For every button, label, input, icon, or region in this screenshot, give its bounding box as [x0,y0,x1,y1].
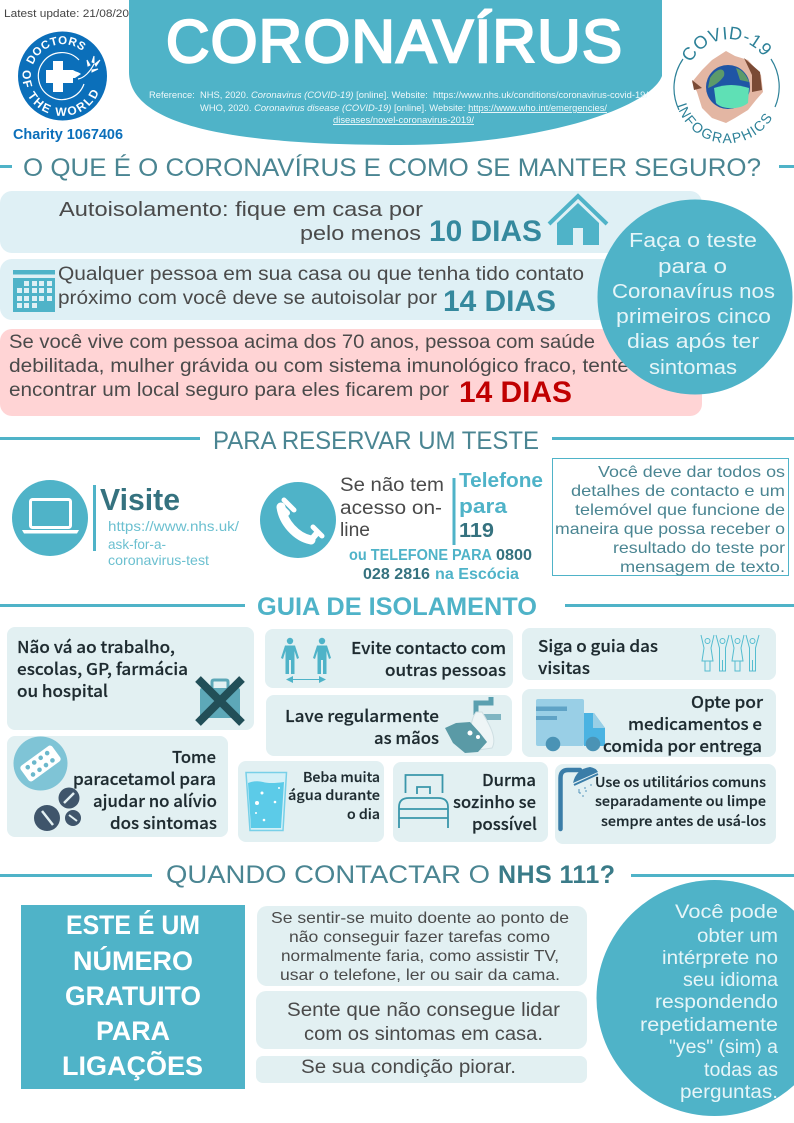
panel: do not go out [7,627,254,730]
callout: interpreter: seu idioma [683,970,778,991]
callout: get tested [598,200,792,394]
visit website [93,482,239,568]
logo: Doctors of the World: OF THE WORLD [22,70,98,116]
panel: free number: ESTE É UM [66,909,200,940]
panel: cannot cope: Sente que não consegue lidar [287,1000,561,1021]
panel: condition worsens: Se sua condição piorar. [301,1057,516,1078]
update date: Latest update: 21/08/20 [4,8,129,20]
panel: wash hands [266,695,512,756]
panel: delivery: Opte por [691,689,763,713]
panel: condition worsens [256,1056,587,1083]
references: WHO, 2020. Coronavirus disease (COVID-19) [online]. Website: https://www.who.int/emergencies/ [200,103,607,114]
panel: household 14 days [0,259,650,320]
heading: book a test: PARA RESERVAR UM TESTE [213,427,539,455]
panel: delivery: comida por entrega [603,733,762,757]
icon: telephone [260,482,336,558]
panel: sleep alone: sozinho se [453,789,536,813]
panel: drink water: água durante [288,784,380,804]
icon: crossed briefcase [198,679,242,723]
logo: COVID-19 infographics: COVID-19 [682,26,771,60]
panel: symptom too severe: não conseguir fazer tarefas como [289,929,550,946]
callout: get tested: para o [658,256,727,278]
panel: shared facilities: sempre antes de usá-los [601,810,766,830]
panel: do not go out: escolas, GP, farmácia [17,656,188,680]
note: contact details: mensagem de texto. [620,559,785,576]
callout: interpreter: obter um [697,926,778,947]
logo: Doctors of the World: DOCTORS [26,36,86,64]
phone booking: Se não tem [340,475,444,496]
panel: avoid contact: outras pessoas [385,657,506,681]
note: contact details: resultado do teste por [613,540,786,557]
panel: delivery [522,689,776,757]
heading: when to contact NHS 111 [0,861,794,889]
panel: shared facilities: Use os utilitários comuns [595,771,766,791]
panel: shared facilities [555,764,776,844]
callout: interpreter [596,880,794,1116]
icon: delivery truck [536,699,605,751]
callout: interpreter: intérprete no [662,948,778,969]
panel: sleep alone [393,762,548,842]
title: CORONAVÍRUS [166,8,622,75]
icon: laptop [12,480,88,556]
panel: cannot cope: com os sintomas em casa. [304,1024,543,1045]
references [149,90,648,126]
panel: paracetamol [7,736,228,837]
icon: house [549,196,607,245]
panel: visits: visitas [538,655,590,679]
panel: visits: Siga o guia das [538,633,658,657]
heading: isolation guide [0,593,794,621]
callout: interpreter: Você pode [675,902,778,923]
icon: shower [560,767,598,829]
visit website: Visite [100,482,180,517]
panel: vulnerable people warning: debilitada, mulher grávida ou com sistema imunológico fraco, tente [9,356,629,377]
panel: self isolate 10 days: Autoisolamento: fique em casa por [59,199,423,221]
callout: get tested: sintomas [649,357,737,379]
phone booking: Telefone [459,470,543,492]
callout: get tested: Coronavírus nos [612,281,775,303]
icon: glass of water [246,772,286,830]
panel: do not go out: Não vá ao trabalho, [17,634,175,658]
visit website: coronavirus-test [108,552,209,568]
note: contact details: detalhes de contacto e um [571,483,785,500]
references: diseases/novel-coronavirus-2019/ [333,115,474,126]
logo: COVID-19 infographics [673,26,780,144]
icon: pills [14,736,81,831]
panel: paracetamol: paracetamol para [73,766,216,790]
panel: household 14 days: 14 DIAS [443,285,556,318]
panel: household 14 days: Qualquer pessoa em sua casa ou que tenha tido contato [58,264,584,285]
note: contact details: maneira que possa receber o [555,521,785,538]
panel: self isolate 10 days [0,191,702,253]
note: contact details [552,458,788,576]
panel: vulnerable people warning [0,329,702,416]
callout: get tested: dias após ter [627,331,759,353]
panel: free number: NÚMERO [73,945,193,976]
panel: self isolate 10 days: pelo menos [300,223,421,245]
callout: get tested: primeiros cinco [616,306,771,328]
panel: vulnerable people warning: 14 DIAS [459,376,572,409]
phone booking: acesso on- [340,498,442,519]
panel: symptom too severe: usar o telefone, ler ou sair da cama. [280,967,560,984]
icon: four figures [701,635,759,671]
panel: drink water: Beba muita [303,766,380,786]
logo: COVID-19 infographics: INFOGRAPHICS [678,103,772,144]
phone booking: 119 [459,520,494,542]
panel: drink water [238,761,384,842]
panel: wash hands: as mãos [374,725,439,749]
panel: cannot cope [256,991,587,1049]
panel: do not go out: ou hospital [17,678,108,702]
phone booking [340,470,543,583]
heading: book a test [0,427,794,455]
heading: what is coronavirus: O QUE É O CORONAVÍRUS E COMO SE MANTER SEGURO? [23,153,761,182]
panel: wash hands: Lave regularmente [285,703,439,727]
callout: interpreter: perguntas. [680,1082,778,1103]
visit website: ask-for-a- [108,536,166,552]
note: contact details: telemóvel que funcione de [575,502,785,519]
heading: when to contact NHS 111: NHS 111? [498,861,615,889]
logo: Doctors of the World [18,32,107,120]
visit website: https://www.nhs.uk/ [108,518,239,534]
icon: two people [281,638,331,683]
panel: paracetamol: Tome [172,744,216,768]
phone booking: na Escócia [435,566,519,583]
icon: calendar [13,270,55,312]
panel: household 14 days: próximo com você deve se autoisolar por [58,288,438,309]
panel: delivery: medicamentos e [628,711,762,735]
phone booking: para [459,496,508,518]
panel: drink water: o dia [347,803,380,823]
references: Reference: NHS, 2020. Coronavirus (COVID-19) [online]. Website: https://www.nhs.uk/conditions/coronavirus-covid-19/ [149,90,648,101]
phone booking: ou TELEFONE PARA [349,547,492,564]
phone booking: 0800 [496,547,532,564]
icon: bed [399,775,448,828]
panel: avoid contact [265,629,513,688]
callout: interpreter: "yes" (sim) a [669,1037,778,1058]
panel: sleep alone: Durma [482,767,536,791]
panel: sleep alone: possível [472,811,537,835]
callout: get tested: Faça o teste [629,230,757,252]
phone booking: 028 2816 [363,566,430,583]
callout: interpreter: repetidamente [640,1015,778,1036]
panel: self isolate 10 days: 10 DIAS [429,215,542,248]
panel: avoid contact: Evite contacto com [351,635,506,659]
panel: shared facilities: separadamente ou limpe [595,790,766,810]
panel: vulnerable people warning: Se você vive com pessoa acima dos 70 anos, pessoa com saúde [9,332,595,353]
callout: interpreter: todas as [704,1060,778,1081]
heading: when to contact NHS 111: QUANDO CONTACTAR O [166,861,490,889]
charity number: Charity 1067406 [13,127,123,143]
panel: paracetamol: dos sintomas [110,810,217,834]
panel: symptom too severe [257,906,587,986]
icon: hand washing [445,697,501,753]
panel: free number: GRATUITO [65,981,201,1011]
header banner [129,0,662,145]
panel: symptom too severe: normalmente faria, como assistir TV, [281,948,559,965]
panel: free number [21,905,245,1089]
heading: isolation guide: GUIA DE ISOLAMENTO [257,593,537,621]
panel: free number: PARA [96,1016,170,1046]
phone booking: line [340,520,370,541]
note: contact details: Você deve dar todos os [598,464,785,481]
panel: vulnerable people warning: encontrar um local seguro para eles ficarem por [9,380,450,401]
panel: visits [522,628,776,680]
panel: symptom too severe: Se sentir-se muito doente ao ponto de [271,910,569,927]
panel: free number: LIGAÇÕES [62,1050,203,1081]
callout: interpreter: respondendo [655,992,778,1013]
panel: paracetamol: ajudar no alívio [93,788,217,812]
